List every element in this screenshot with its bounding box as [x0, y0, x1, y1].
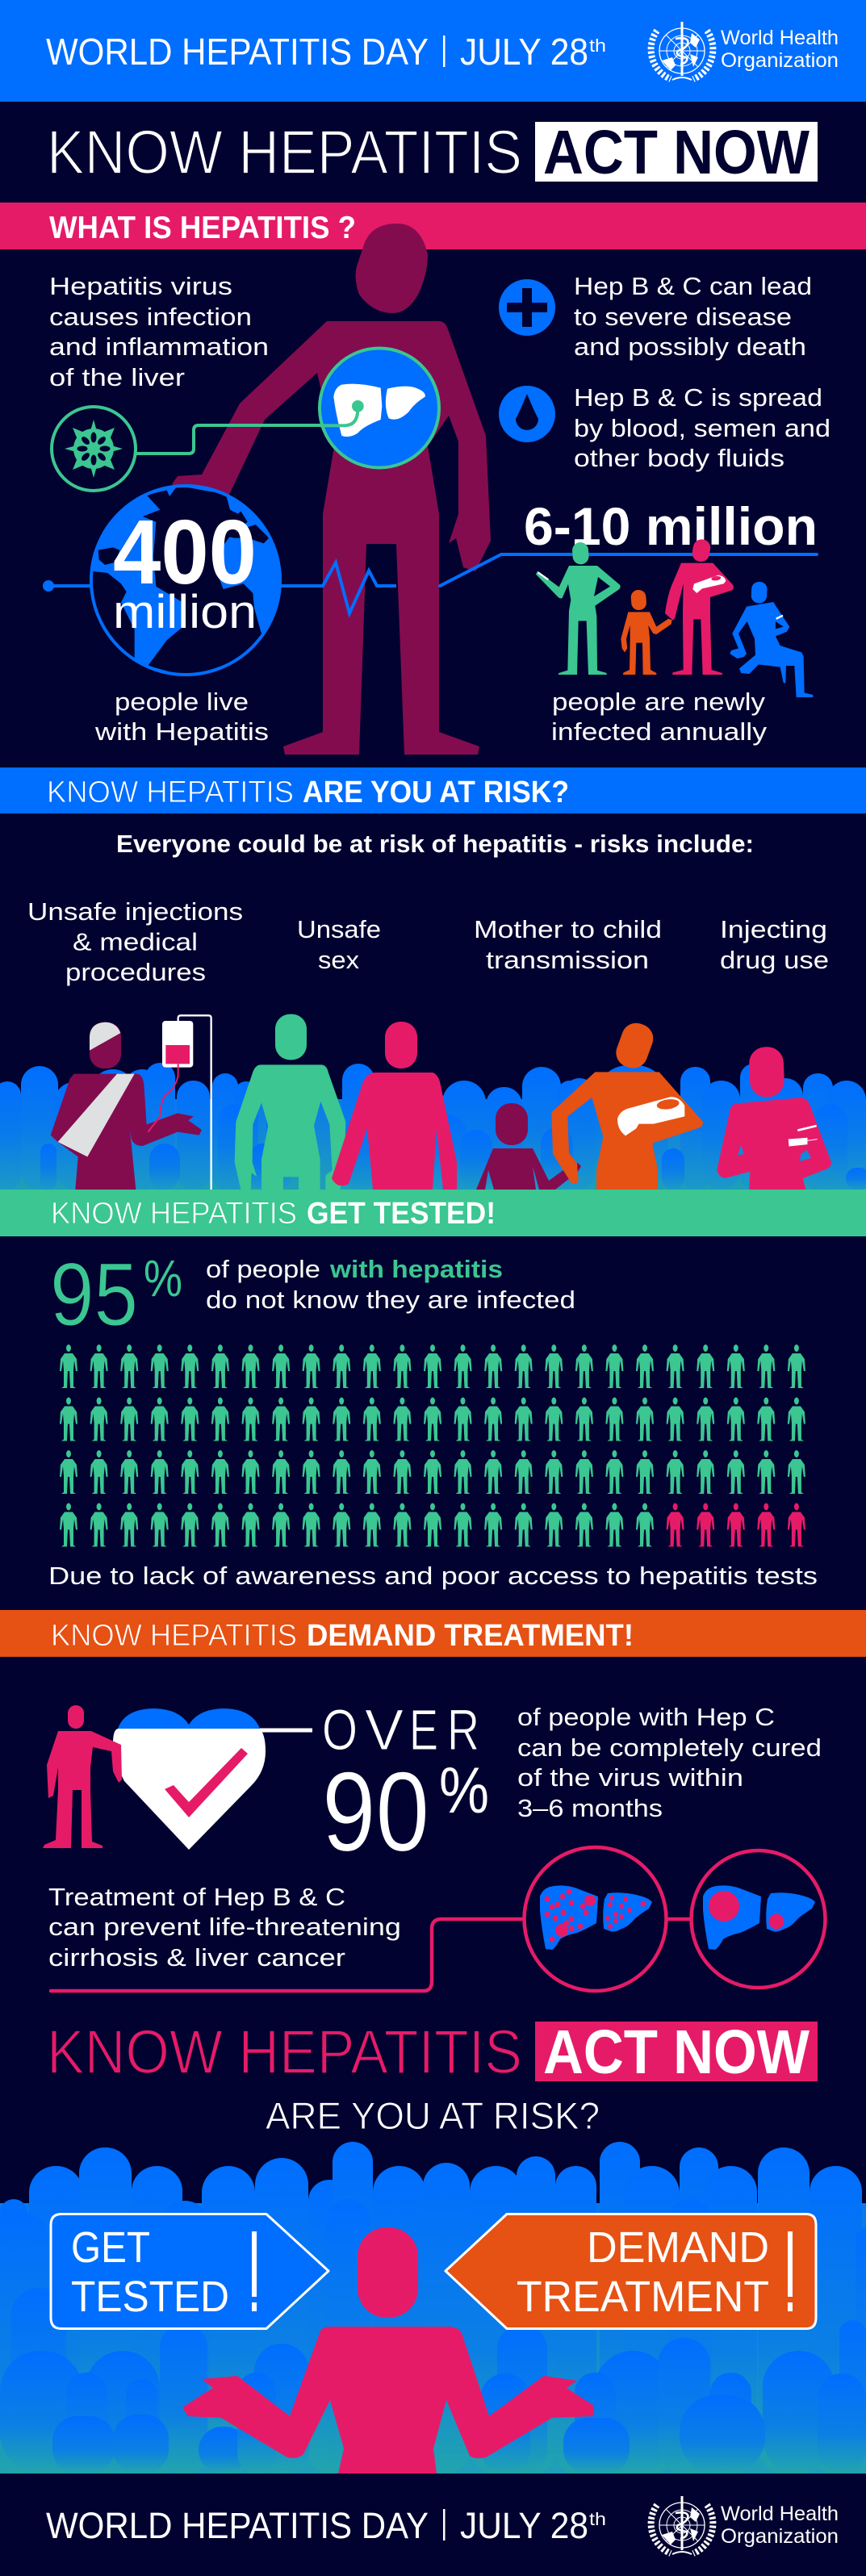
text: spread: by blood, semen and [574, 414, 830, 442]
figure: orange mother with baby [551, 1019, 703, 1190]
icon: liver in circle [320, 349, 439, 468]
text: what is hepatitis: and inflammation [49, 332, 269, 361]
risk label: unsafe injections: procedures [65, 958, 206, 986]
caption: people live with hepatitis: people live [115, 688, 249, 716]
patient body [51, 1022, 202, 1190]
sign: demand treatment: DEMAND [587, 2223, 769, 2272]
caption: people live with hepatitis [94, 688, 269, 746]
section band: are you at risk: ARE YOU AT RISK? [303, 776, 569, 809]
risk label: unsafe sex: Unsafe [297, 915, 381, 943]
text: what is hepatitis: Hepatitis virus [49, 272, 232, 300]
text: severe disease: to severe disease [574, 303, 792, 331]
WHO logo [651, 22, 839, 80]
figure: green man [536, 542, 621, 675]
text: cured [517, 1703, 822, 1822]
main title: ACT NOW [543, 118, 810, 187]
sign: get tested: GET [71, 2223, 150, 2272]
stat: 95 percent: % [144, 1249, 182, 1307]
closing title: ACT NOW [543, 2018, 810, 2087]
caption: people live with hepatitis: with Hepatitis [94, 717, 269, 746]
section band: are you at risk [0, 767, 866, 813]
figure: shrugging person [182, 2227, 594, 2474]
connector line from virus to liver [136, 412, 358, 454]
figure: pink person at heart [43, 1705, 122, 1848]
figure: green man [235, 1014, 345, 1190]
text: do not know they are infected: of people [206, 1255, 320, 1283]
main title: KNOW HEPATITIS [47, 118, 522, 187]
WHO logo: Organization [721, 49, 839, 72]
caption: newly infected: people are newly [552, 688, 766, 716]
risk label: unsafe injections: & medical [73, 928, 198, 956]
header title: th [589, 36, 606, 56]
text: treatment prevents cirrhosis [48, 1883, 401, 1972]
risk label: unsafe sex [297, 915, 381, 974]
figure: pink woman [332, 1022, 457, 1190]
footer WHO logo: Organization [721, 2525, 839, 2548]
header title: WORLD HEPATITIS DAY [46, 31, 429, 73]
risk label: unsafe sex: sex [318, 946, 360, 974]
crowd background bottom [0, 2142, 866, 2474]
stat: over 90 percent [322, 1699, 489, 1875]
footer title: JULY 28 [460, 2505, 588, 2546]
body figure [172, 224, 491, 755]
section band: demand treatment: DEMAND TREATMENT! [307, 1619, 634, 1653]
risk label: unsafe injections [27, 897, 243, 986]
text: what is hepatitis: of the liver [49, 363, 185, 391]
caption: newly infected [551, 688, 768, 746]
stat: 95 percent: 95 [50, 1245, 138, 1344]
text: what is hepatitis: causes infection [49, 303, 252, 331]
risk label: mother to child: transmission [486, 946, 649, 974]
text: cured: of the virus within [517, 1763, 743, 1792]
footer WHO logo: World Health [721, 2503, 839, 2525]
IV bag [162, 1021, 193, 1068]
risk label: mother to child [474, 915, 662, 974]
sign: demand treatment: TREATMENT [517, 2273, 769, 2321]
closing title: KNOW HEPATITIS [47, 2018, 522, 2087]
ECG line [43, 554, 817, 613]
figure: injecting drug user [717, 1047, 831, 1190]
stat: over 90 percent: V [365, 1699, 404, 1763]
sign: demand treatment [446, 2214, 816, 2329]
text: spread: Hep B & C is spread [574, 383, 822, 412]
figure: pink mother with baby [665, 538, 734, 675]
text: treatment prevents cirrhosis: can prevent life-threatening [48, 1913, 401, 1941]
text: cured: 3–6 months [517, 1794, 663, 1822]
stat: 400 million: million [113, 586, 257, 638]
risk label: injecting drug use [720, 915, 829, 974]
text: severe disease [574, 272, 812, 361]
text: severe disease: Hep B & C can lead [574, 272, 812, 300]
stat: 6-10 million: 6-10 million [524, 496, 818, 556]
text: spread: other body fluids [574, 444, 784, 472]
text: what is hepatitis [49, 272, 269, 391]
family figures [536, 538, 813, 697]
section band: get tested [0, 1190, 866, 1236]
sign: get tested [51, 2214, 328, 2329]
footer WHO logo [651, 2496, 839, 2554]
risk intro text: Everyone could be at risk of hepatitis - risks include: [116, 830, 754, 858]
figure: blue kneeling person [730, 582, 813, 697]
sign: get tested: TESTED [71, 2273, 229, 2321]
text: treatment prevents cirrhosis: Treatment of Hep B & C [48, 1883, 345, 1911]
section band: demand treatment [0, 1610, 866, 1657]
stat: over 90 percent: O [322, 1699, 358, 1763]
text: do not know they are infected: with hepatitis [329, 1255, 503, 1283]
section band: what is hepatitis: WHAT IS HEPATITIS ? [49, 211, 356, 245]
section band: demand treatment: KNOW HEPATITIS [51, 1619, 297, 1653]
section band: are you at risk: KNOW HEPATITIS [47, 776, 294, 809]
text: treatment prevents cirrhosis: cirrhosis & liver cancer [48, 1943, 345, 1972]
globe [83, 485, 281, 680]
text: lack of awareness: Due to lack of awareness and poor access to hepatitis tests [48, 1562, 818, 1590]
IV pole [178, 1015, 211, 1190]
footer title: WORLD HEPATITIS DAY [46, 2505, 429, 2546]
section band: what is hepatitis [0, 203, 866, 249]
header band [0, 0, 866, 102]
icon: heart with check [113, 1708, 312, 1850]
closing question: ARE YOU AT RISK? [266, 2094, 600, 2137]
WHO logo: World Health [721, 27, 839, 49]
icon: blood drop [499, 386, 555, 442]
risk label: injecting drug use: drug use [720, 946, 829, 974]
stat: over 90 percent: 90 [322, 1748, 429, 1875]
text: severe disease: and possibly death [574, 332, 806, 361]
stat: over 90 percent: R [447, 1699, 479, 1763]
main title [47, 118, 818, 187]
text: spread [574, 383, 830, 472]
icon: virus [52, 407, 136, 491]
icon: liver with cirrhosis [525, 1847, 667, 1991]
stat: 400 million: 400 [113, 501, 257, 603]
icon: plus [499, 279, 555, 336]
crowd background [0, 1063, 866, 1190]
stat: over 90 percent: % [439, 1754, 489, 1827]
section band: get tested: GET TESTED! [307, 1197, 496, 1231]
closing title [47, 2018, 818, 2087]
connector line to livers [51, 1919, 691, 1991]
figure: orange child [621, 589, 672, 675]
figure: patient with IV drip [51, 1015, 211, 1190]
IV tube [148, 1064, 178, 1132]
caption: newly infected: infected annually [551, 717, 768, 746]
figure: maroon child [476, 1103, 581, 1190]
icon: liver with cancer [691, 1850, 825, 1988]
text: cured: can be completely cured [517, 1733, 822, 1762]
risk label: unsafe injections: Unsafe injections [27, 897, 243, 926]
text: do not know they are infected [206, 1255, 575, 1314]
risk label: injecting drug use: Injecting [720, 915, 827, 943]
risk label: mother to child: Mother to child [474, 915, 662, 943]
text: cured: of people with Hep C [517, 1703, 775, 1731]
header title: JULY 28 [460, 31, 588, 73]
pictogram: 100 people, 95 green, 5 pink [60, 1344, 805, 1546]
text: do not know they are infected: do not know they are infected [206, 1286, 575, 1314]
stat: over 90 percent: E [409, 1699, 438, 1763]
footer title: th [589, 2509, 606, 2529]
section band: get tested: KNOW HEPATITIS [51, 1197, 297, 1231]
